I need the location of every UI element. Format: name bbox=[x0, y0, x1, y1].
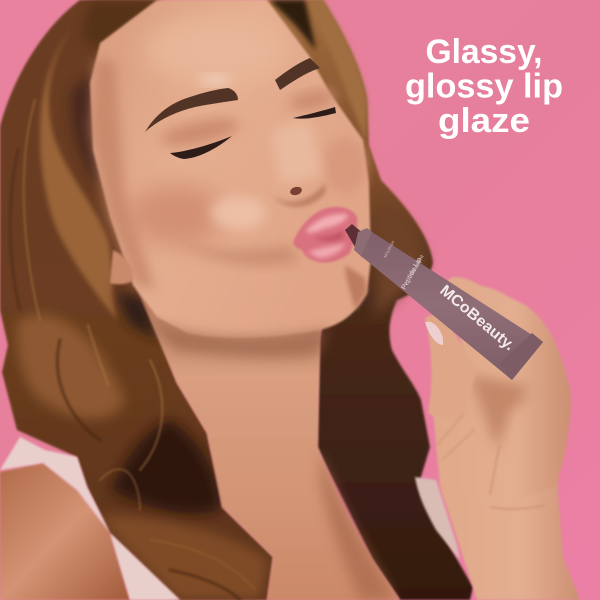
nose underside bbox=[272, 183, 326, 207]
eye socket right bbox=[287, 86, 337, 114]
palm shade bbox=[470, 375, 526, 450]
jaw shadow on neck bbox=[150, 320, 330, 358]
dark under-ear bbox=[115, 290, 160, 340]
tube bbox=[345, 224, 543, 380]
ear bbox=[110, 250, 133, 284]
palm crease bbox=[490, 445, 545, 509]
tube: NOURISH bbox=[382, 240, 396, 258]
upper crown shading bbox=[80, 0, 165, 50]
left face shade bbox=[90, 60, 155, 290]
shoulder bbox=[0, 463, 130, 600]
fingers and palm bbox=[432, 277, 571, 510]
brand: MCoBeauty. bbox=[436, 282, 518, 354]
lower highlight curl bbox=[100, 515, 268, 600]
dark curl bbox=[110, 420, 221, 514]
strands bbox=[10, 100, 255, 600]
nostril bbox=[289, 186, 303, 196]
golden side strand bbox=[305, 0, 367, 140]
blush bbox=[127, 185, 223, 245]
dark sliver at parting bbox=[270, 0, 316, 50]
top fabric at right bbox=[415, 477, 460, 560]
small product text: Peptide Lip bbox=[401, 257, 423, 291]
nose bbox=[272, 120, 322, 185]
title: glaze bbox=[438, 102, 530, 140]
hair: right mass bbox=[265, 0, 473, 600]
thumb creases bbox=[437, 415, 475, 460]
side curl tone bbox=[375, 195, 425, 320]
hair: left mass bbox=[0, 0, 273, 600]
title bbox=[405, 33, 563, 140]
chest shadow bbox=[318, 450, 395, 600]
tube cap and nozzle bbox=[345, 224, 364, 247]
hand bbox=[425, 277, 571, 510]
right cheek blush bbox=[323, 137, 367, 193]
eye socket left bbox=[159, 113, 241, 151]
brow bone highlight bbox=[199, 75, 231, 85]
neck and chest bbox=[133, 280, 400, 600]
chin shadow from tube bbox=[345, 265, 367, 310]
mid-left highlight bbox=[17, 315, 125, 419]
eyebrows bbox=[145, 58, 320, 132]
tube collar bbox=[354, 228, 377, 258]
tube crimp bbox=[500, 333, 543, 380]
cheek crease below bbox=[175, 240, 300, 266]
cheek highlight bbox=[210, 197, 266, 229]
title: Glassy, bbox=[426, 33, 542, 71]
lips bbox=[293, 207, 357, 263]
golden band bbox=[40, 28, 118, 320]
face bbox=[90, 0, 371, 338]
thumb bbox=[425, 315, 478, 421]
thumbnail bbox=[425, 322, 443, 345]
forearm bbox=[440, 480, 580, 600]
title: glossy lip bbox=[405, 68, 563, 106]
forehead glow bbox=[145, 16, 285, 84]
tank top strap bbox=[0, 437, 180, 600]
tube: Treatment bbox=[409, 254, 426, 277]
dark inner band bbox=[71, 60, 110, 190]
tube body bbox=[361, 232, 543, 380]
eyelashes bbox=[170, 107, 336, 159]
